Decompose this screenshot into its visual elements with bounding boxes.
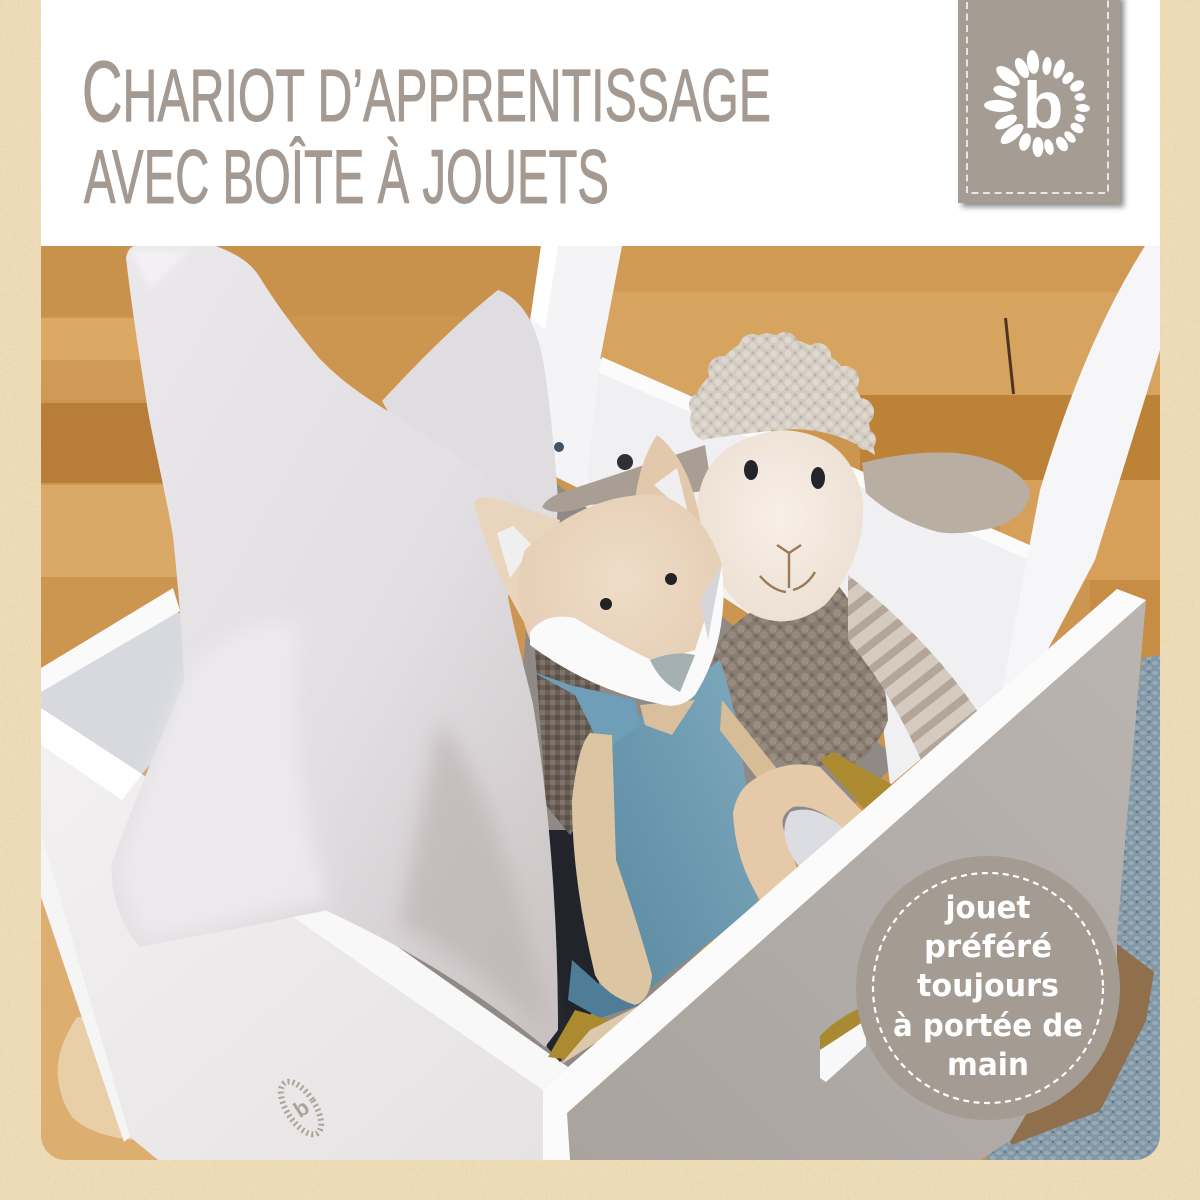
cart right side: [567, 600, 1146, 1160]
sheep right ear: [862, 452, 1030, 533]
fox collar knot: [533, 672, 640, 745]
sheep face: [697, 430, 863, 621]
cart interior fill: [398, 484, 888, 1068]
star pillow: [112, 246, 558, 1047]
logo tag: [958, 0, 1120, 203]
toy: fox: [474, 435, 778, 1065]
cart back rim left: [41, 588, 180, 692]
mustard cloth: [548, 1010, 610, 1060]
badge: [856, 856, 1120, 1120]
logo stamp on cart: [273, 1075, 329, 1141]
title: AVEC BOÎTE À JOUETS: [84, 135, 609, 220]
cart left side: [41, 708, 568, 1160]
fox neck: [640, 700, 695, 735]
logo stamp on cart: b: [289, 1094, 314, 1123]
blue blanket: [985, 655, 1160, 1160]
cart left interior: [41, 612, 184, 774]
screws: [554, 442, 564, 452]
sheep wool hat: [689, 332, 876, 455]
photo: toy cart: [41, 246, 1160, 1160]
badge text: [893, 890, 1083, 1083]
toy: sheep: [535, 332, 1030, 1062]
fox left arm: [572, 733, 652, 1005]
icon: sun logo: b: [1023, 68, 1063, 142]
fox nose: [650, 653, 695, 692]
wooden block: [1005, 944, 1154, 1145]
right handle: [1002, 246, 1160, 690]
wooden ring toy: [733, 764, 863, 900]
badge text: à portée de: [893, 1008, 1083, 1044]
left handle: [530, 246, 622, 492]
cart interior dark gap: [547, 830, 600, 1062]
badge text: main: [947, 1047, 1029, 1083]
badge text: jouet: [944, 890, 1031, 926]
sheep arm: [848, 575, 980, 762]
sheep knit arm left: [535, 650, 600, 835]
fox leg loop: [568, 960, 640, 1018]
header panel: [41, 0, 1160, 246]
icon: sun logo: [984, 49, 1090, 157]
fox head: [519, 495, 724, 706]
slot handle hole: [820, 1009, 866, 1082]
mustard cloth right: [820, 752, 893, 812]
cart right rim: [543, 589, 1146, 1160]
fox scarf and overalls: [610, 660, 758, 988]
fox right arm: [720, 700, 778, 782]
star pillow back arm: [382, 290, 558, 519]
cart back wall: [575, 357, 1040, 785]
sheep body: [710, 586, 888, 766]
wooden wheel: [58, 1017, 132, 1140]
wood floor: [41, 246, 1160, 1160]
sheep left ear: [542, 445, 712, 512]
fox muzzle: [530, 565, 723, 706]
badge text: toujours: [917, 968, 1059, 1004]
title: [82, 44, 771, 220]
fox ears: [474, 498, 560, 622]
title: CHARIOT D’APPRENTISSAGE: [82, 44, 771, 140]
badge text: préféré: [924, 929, 1052, 965]
